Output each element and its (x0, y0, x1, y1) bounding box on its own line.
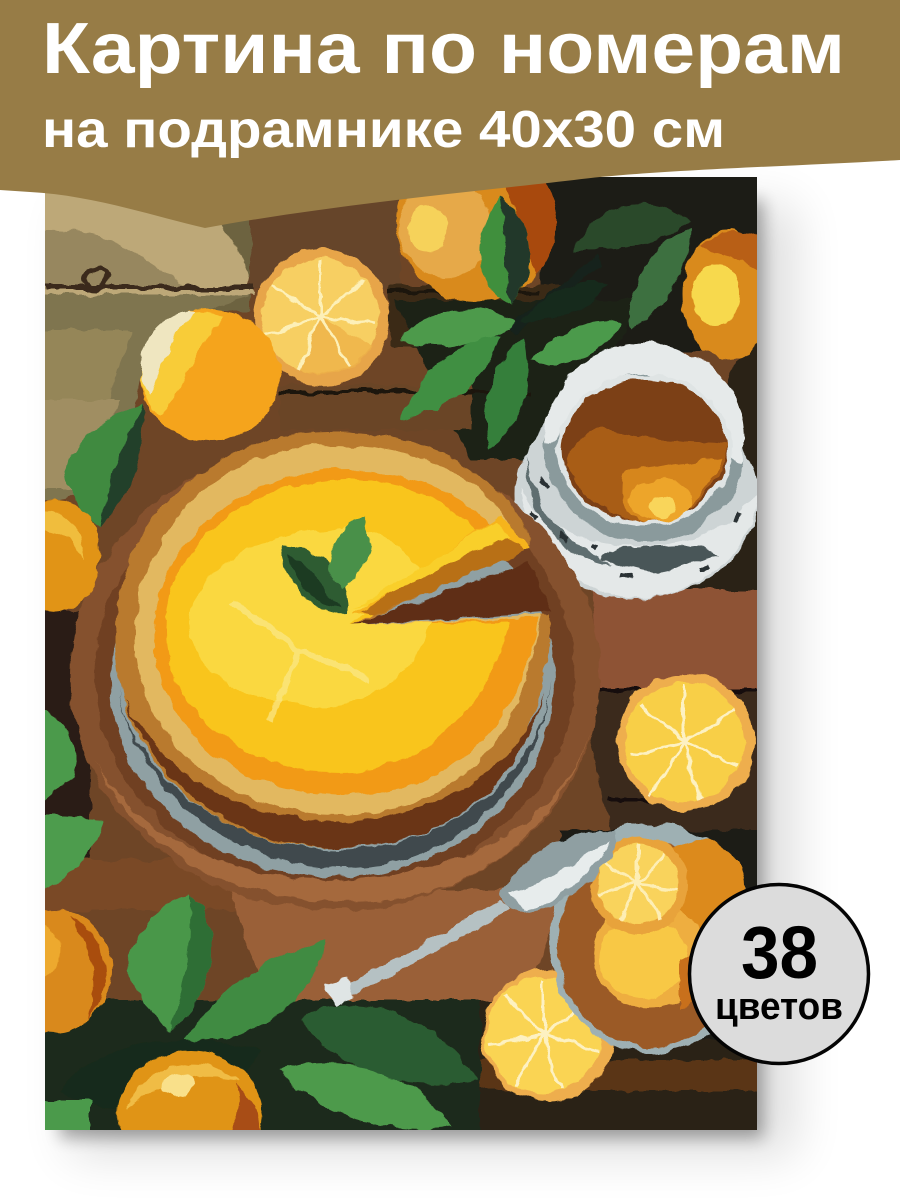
right lemon half (617, 673, 755, 811)
title: Картина по номерам (42, 9, 845, 89)
left orange (45, 498, 102, 612)
top banner (0, 0, 900, 228)
wooden board (70, 440, 600, 910)
small plate with lemon slices (549, 823, 755, 1053)
whole lemon (140, 309, 280, 441)
metal plate (110, 560, 556, 878)
bottom left leaves (40, 893, 478, 1135)
wooden table background (30, 160, 770, 1150)
subtitle: на подрамнике 40х30 см (42, 101, 725, 159)
tea cup on saucer (514, 343, 758, 599)
left leaf (65, 405, 145, 530)
lemon tart (115, 432, 550, 848)
top leaves (400, 195, 690, 450)
canvas drop shadow (60, 200, 795, 1155)
colour count badge: 38 (741, 911, 818, 994)
bottom orange (116, 1050, 262, 1130)
mint leaves on tart (282, 515, 370, 612)
cut tart slice (355, 515, 530, 615)
bottom left orange (45, 908, 114, 1034)
top lemon half (254, 249, 390, 385)
cut wedge gap (352, 562, 552, 625)
colour count badge (690, 884, 868, 1064)
right top orange (680, 228, 757, 360)
top orange (396, 183, 558, 302)
spoon (325, 831, 617, 1006)
bottom lemon half (482, 969, 614, 1101)
left lower leaves (45, 710, 104, 888)
painting: lemon tart still life (45, 177, 757, 1130)
colour count badge: цветов (715, 986, 843, 1028)
